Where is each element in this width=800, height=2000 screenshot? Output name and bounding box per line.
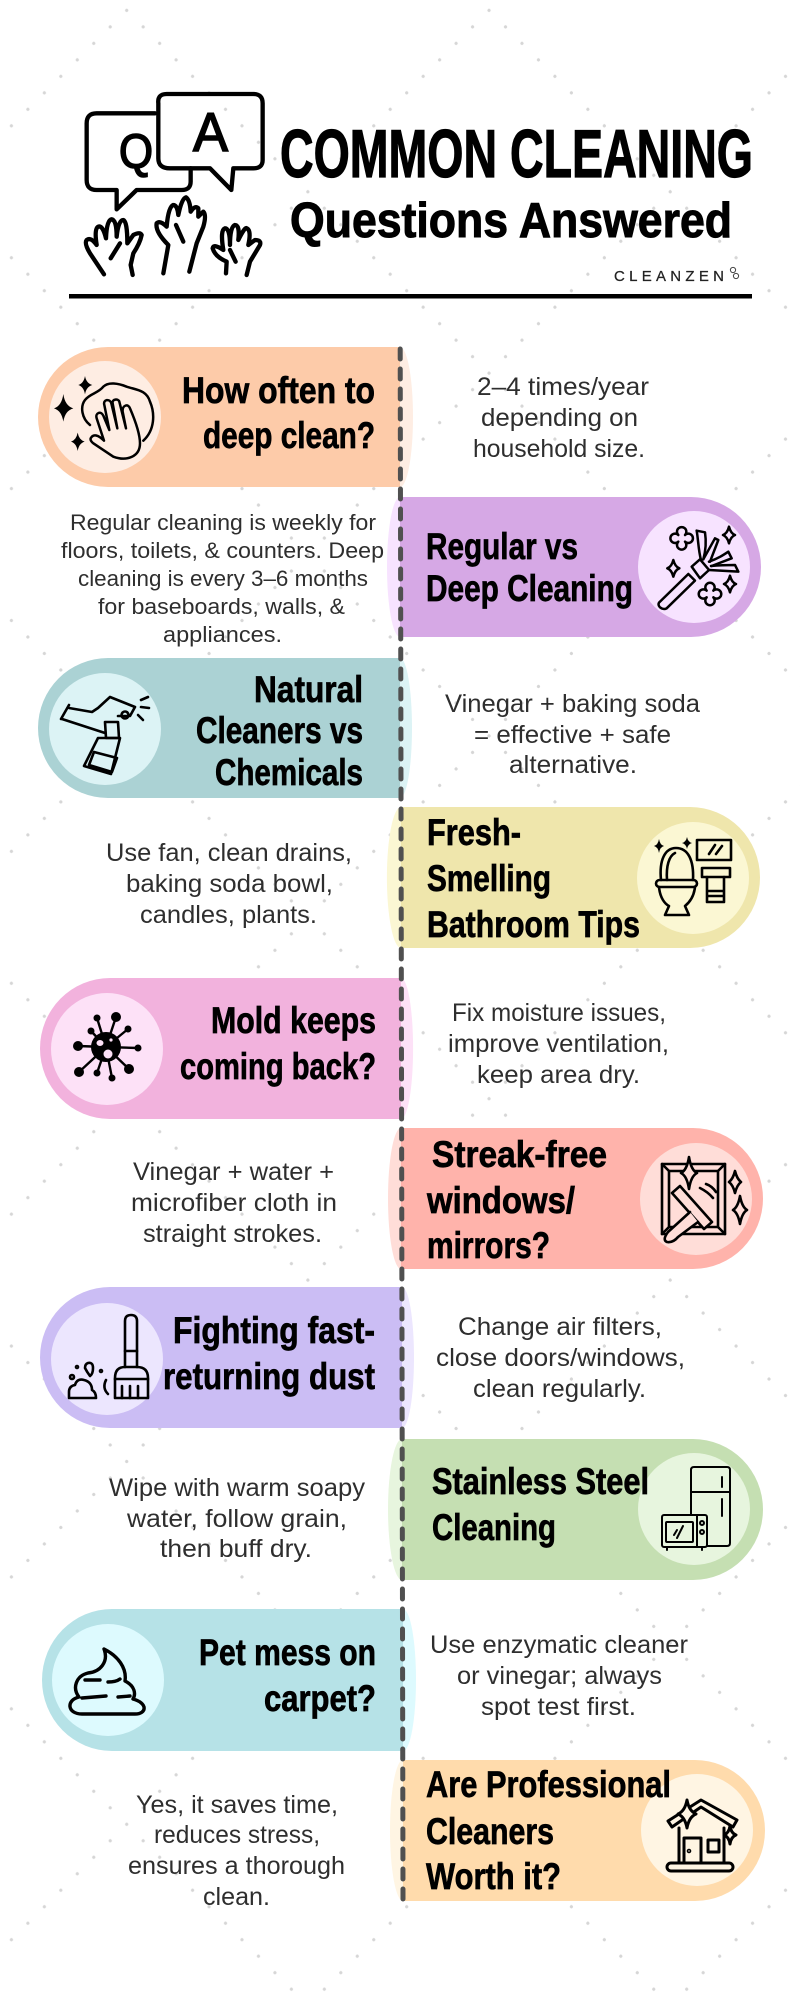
answer: regular vs deep cleaning [61, 510, 384, 647]
answer: natural cleaners vs chemicals [445, 690, 700, 779]
heading: How often to [182, 370, 375, 411]
panel: natural cleaners vs chemicals [38, 658, 412, 798]
heading: Natural [254, 669, 363, 710]
header [69, 94, 753, 298]
icon: fridge and microwave [662, 1467, 730, 1550]
heading: Chemicals [215, 752, 363, 793]
heading: Streak-free [432, 1134, 607, 1175]
heading: Cleaners [426, 1811, 554, 1852]
icon: Q and A speech bubbles with raised hands [86, 94, 263, 275]
heading: deep clean? [203, 415, 375, 456]
answer: regular vs deep cleaning: Regular cleaning is weekly for [70, 510, 376, 535]
icon: Q and A speech bubbles with raised hands: A [193, 101, 228, 163]
panel: are professional cleaners worth it [390, 1760, 765, 1901]
heading [432, 1461, 649, 1548]
answer: pet mess on carpet: or vinegar; always [457, 1662, 662, 1690]
heading [199, 1632, 376, 1719]
heading: Mold keeps [211, 1000, 376, 1041]
answer: fresh-smelling bathroom tips [106, 839, 352, 929]
heading: Cleaning [432, 1507, 556, 1548]
answer: regular vs deep cleaning: appliances. [163, 622, 282, 647]
heading: Stainless Steel [432, 1461, 649, 1502]
answer: fresh-smelling bathroom tips: Use fan, clean drains, [106, 839, 352, 867]
icon: feather duster [659, 527, 738, 609]
panel: pet mess on carpet [42, 1609, 416, 1751]
heading: mirrors? [427, 1225, 550, 1266]
icon: squeegee on window [662, 1157, 747, 1242]
icon: Q and A speech bubbles with raised hands: Q [119, 126, 153, 179]
heading [196, 669, 363, 793]
answer: fighting fast-returning dust: clean regularly. [473, 1375, 646, 1403]
icon: toilet, mirror and paper roll [654, 837, 731, 915]
answer: streak-free windows and mirrors [131, 1158, 337, 1248]
panel: regular vs deep cleaning [387, 497, 761, 637]
heading: windows/ [426, 1180, 575, 1221]
heading: Are Professional [426, 1764, 671, 1805]
heading: carpet? [264, 1678, 376, 1719]
heading: Smelling [427, 858, 551, 899]
answer: natural cleaners vs chemicals: Vinegar + baking soda [445, 690, 700, 718]
answer: mold keeps coming back: improve ventilation, [448, 1030, 669, 1058]
answer: stainless steel cleaning: water, follow grain, [126, 1505, 347, 1533]
answer: how often to deep clean: household size. [473, 435, 645, 463]
icon: hand wiping with sparkles [54, 376, 153, 459]
answer: streak-free windows and mirrors: Vinegar + water + [133, 1158, 334, 1186]
heading [180, 1000, 376, 1087]
answer: fresh-smelling bathroom tips: candles, plants. [140, 901, 317, 929]
answer: are professional cleaners worth it: ensures a thorough [128, 1852, 345, 1880]
answer: how often to deep clean: depending on [481, 404, 638, 432]
answer: pet mess on carpet [430, 1631, 688, 1721]
answer: fighting fast-returning dust: Change air filters, [458, 1313, 662, 1341]
answer: regular vs deep cleaning: floors, toilets, & counters. Deep [61, 538, 384, 563]
answer: are professional cleaners worth it: clean. [203, 1883, 270, 1911]
subtitle: Questions Answered [290, 194, 732, 248]
answer: pet mess on carpet: Use enzymatic cleaner [430, 1631, 688, 1659]
logo: Cleanzen: CLEANZEN [614, 268, 724, 285]
heading [163, 1310, 375, 1397]
panel: mold keeps coming back [40, 978, 413, 1119]
icon: sparkling clean house [667, 1800, 737, 1871]
answer: how often to deep clean: 2–4 times/year [477, 373, 649, 401]
heading [426, 1764, 671, 1897]
panel: streak-free windows and mirrors [388, 1128, 763, 1269]
answer: stainless steel cleaning: Wipe with warm soapy [109, 1474, 366, 1502]
answer: pet mess on carpet: spot test first. [481, 1693, 636, 1721]
answer: are professional cleaners worth it: reduces stress, [154, 1821, 320, 1849]
icon: mold spore [73, 1012, 142, 1082]
answer: fresh-smelling bathroom tips: baking soda bowl, [126, 870, 333, 898]
heading: Fresh- [427, 812, 521, 853]
answer: streak-free windows and mirrors: straight strokes. [143, 1220, 322, 1248]
heading [426, 526, 633, 609]
answer: natural cleaners vs chemicals: = effective + safe [474, 721, 671, 749]
answer: mold keeps coming back [448, 999, 669, 1089]
panel: how often to deep clean [38, 347, 413, 487]
panel: fresh-smelling bathroom tips [387, 807, 760, 948]
heading [182, 370, 375, 456]
answer: how often to deep clean [473, 373, 649, 463]
heading: Worth it? [426, 1856, 561, 1897]
heading: Pet mess on [199, 1632, 376, 1673]
answer: mold keeps coming back: Fix moisture issues, [452, 999, 666, 1027]
answer: stainless steel cleaning [109, 1474, 366, 1563]
answer: fighting fast-returning dust [436, 1313, 685, 1403]
heading: Regular vs [426, 526, 578, 567]
answer: regular vs deep cleaning: for baseboards, walls, & [98, 594, 345, 619]
answer: streak-free windows and mirrors: microfiber cloth in [131, 1189, 337, 1217]
heading [426, 1134, 607, 1266]
panel: fighting fast-returning dust [40, 1287, 414, 1428]
dashed centre timeline [400, 349, 403, 1899]
answer: fighting fast-returning dust: close doors/windows, [436, 1344, 685, 1372]
icon: broom sweeping dust [69, 1315, 148, 1398]
answer: regular vs deep cleaning: cleaning is every 3–6 months [78, 566, 368, 591]
heading: Cleaners vs [196, 710, 363, 751]
answer: stainless steel cleaning: then buff dry. [160, 1535, 312, 1563]
icon: hand holding spray bottle [61, 697, 149, 774]
heading: Deep Cleaning [426, 568, 633, 609]
icon: pet mess [70, 1649, 144, 1714]
answer: mold keeps coming back: keep area dry. [477, 1061, 640, 1089]
answer: are professional cleaners worth it [128, 1791, 345, 1911]
heading [427, 812, 640, 945]
panel: stainless steel cleaning [388, 1439, 763, 1580]
answer: are professional cleaners worth it: Yes, it saves time, [136, 1791, 338, 1819]
heading: returning dust [163, 1356, 375, 1397]
heading: coming back? [180, 1046, 376, 1087]
answer: natural cleaners vs chemicals: alternative. [509, 751, 637, 779]
heading: Bathroom Tips [427, 904, 640, 945]
heading: Fighting fast- [173, 1310, 375, 1351]
